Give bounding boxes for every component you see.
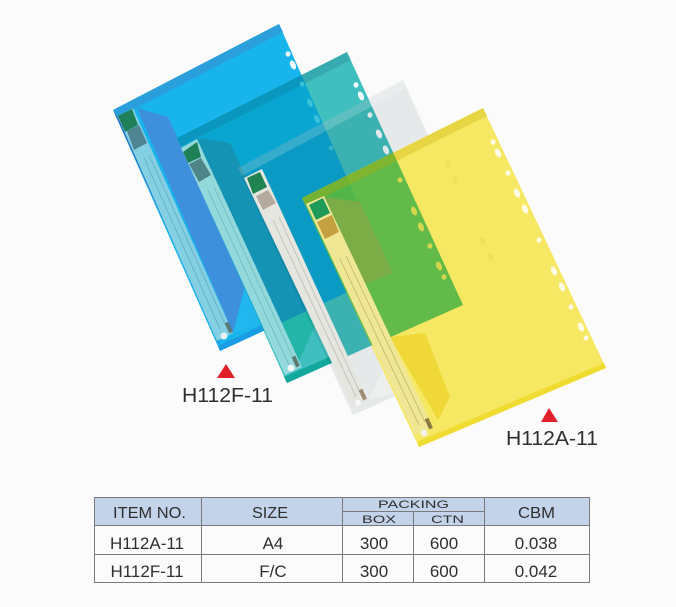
table header text: SIZE xyxy=(252,505,288,522)
table row: H112A-11: 0.038 xyxy=(515,534,557,553)
table row: H112A-11: 300 xyxy=(360,534,388,553)
teal folder xyxy=(177,52,394,383)
table header text: PACKING xyxy=(378,499,449,511)
specification table xyxy=(94,497,590,582)
white folder xyxy=(238,80,520,415)
table row: H112A-11: 600 xyxy=(430,534,458,553)
table row: H112F-11: 600 xyxy=(430,562,458,581)
label: H112F-11: H112F-11 xyxy=(182,384,273,407)
yellow folder xyxy=(302,108,606,447)
table header text: ITEM NO. xyxy=(113,505,186,522)
table header text: BOX xyxy=(362,514,397,526)
table row: H112A-11: A4 xyxy=(263,534,283,553)
label: H112A-11: H112A-11 xyxy=(506,427,598,450)
table row: H112F-11 xyxy=(110,562,557,581)
table row: H112F-11: H112F-11 xyxy=(110,562,184,581)
product photo: four folders xyxy=(113,24,606,447)
table header text: CTN xyxy=(431,514,464,526)
table row: H112A-11 xyxy=(110,534,557,553)
table header text xyxy=(113,499,555,526)
marker: H112F-11 triangle xyxy=(217,364,235,378)
marker: H112A-11 triangle xyxy=(541,408,558,422)
table header text: CBM xyxy=(518,505,555,522)
table row: H112F-11: F/C xyxy=(259,562,287,581)
table row: H112F-11: 0.042 xyxy=(515,562,557,581)
blue folder xyxy=(113,24,389,351)
table header background xyxy=(94,497,590,525)
table row: H112A-11: H112A-11 xyxy=(110,534,184,553)
table row: H112F-11: 300 xyxy=(360,562,388,581)
